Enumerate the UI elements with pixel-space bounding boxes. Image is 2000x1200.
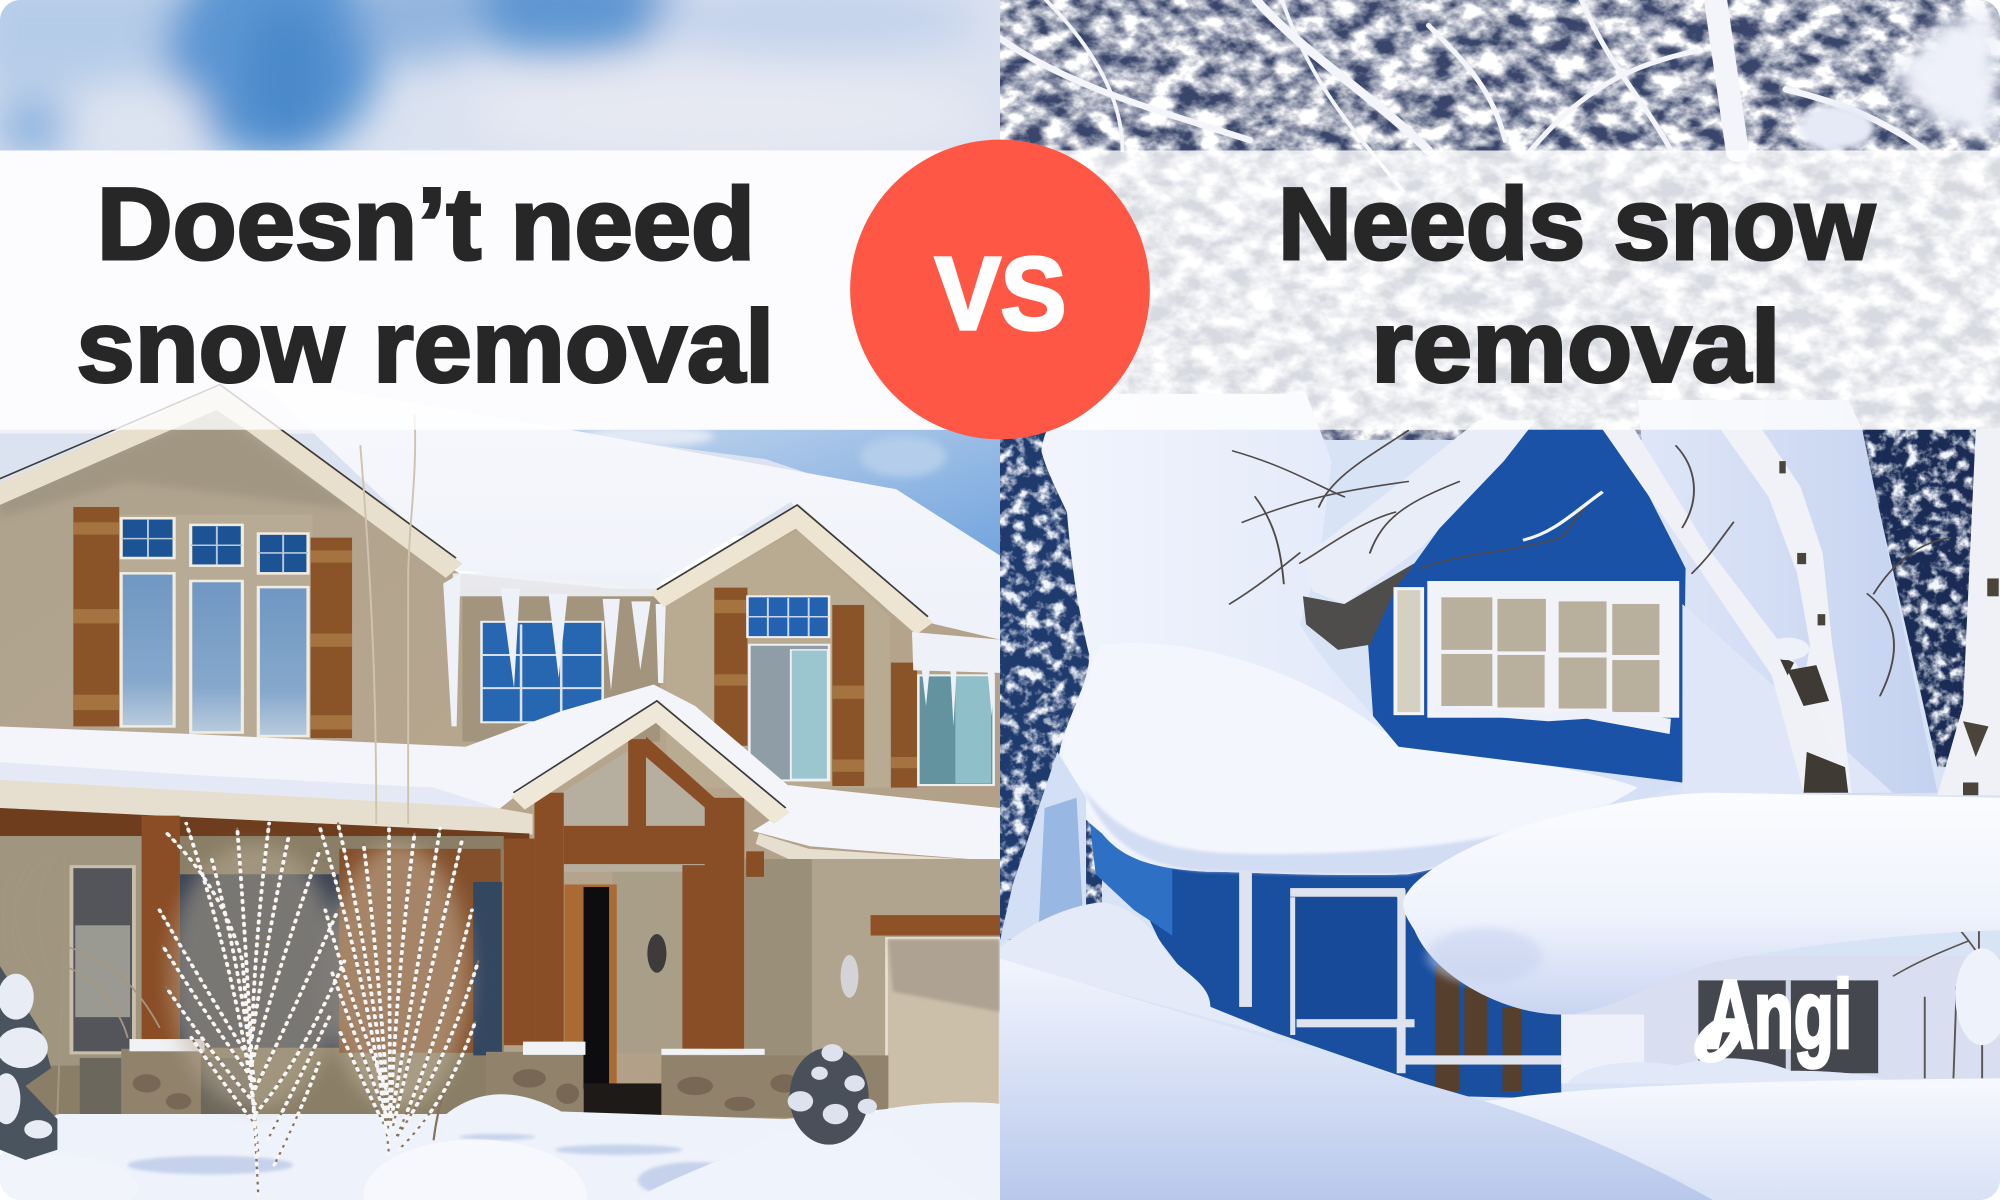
birch trunk second (1721, 430, 1851, 793)
soft twig haze (169, 844, 469, 1109)
center upper wall with window (462, 589, 660, 742)
icicles center (443, 573, 666, 726)
blue dormer (1367, 430, 1686, 782)
panel: house that needs snow removal (1000, 0, 2000, 1200)
lower roof snow (0, 685, 1000, 862)
right bare tree and posts (1893, 849, 1989, 1078)
far right window (918, 675, 994, 785)
right gable shutters (714, 588, 917, 788)
lower blue cabin wall (1086, 788, 1574, 1099)
dark forest left (1000, 430, 1102, 940)
right snow mound (631, 1127, 982, 1200)
small snowy conifer bush (788, 1044, 877, 1145)
snow column at left corner (1000, 752, 1086, 941)
blue door (1295, 897, 1397, 1019)
garage door (886, 938, 1000, 1109)
entry gable interior (562, 752, 705, 872)
dark entry base (584, 1083, 662, 1115)
porch rail (1405, 1055, 1561, 1065)
shutters left (73, 507, 352, 738)
right roof fascia (756, 834, 962, 859)
light sconce (647, 934, 666, 973)
small snowball right (1955, 948, 2000, 1045)
title left: snow removal (77, 289, 774, 403)
big snow overhang (1403, 793, 2000, 1015)
upper transom windows (121, 518, 308, 573)
title left: Doesn’t need (97, 167, 755, 281)
right gable fascia (657, 516, 925, 628)
vs badge: VS (935, 235, 1066, 351)
sheltered snow wall (1638, 400, 1938, 798)
shaded snow under overhang (1427, 928, 1542, 984)
snow mound (364, 1140, 587, 1200)
upper snow mass (1041, 394, 1686, 875)
snow on window sill (1434, 706, 1671, 734)
stone pillars (121, 1049, 888, 1119)
ground shadows (128, 1134, 753, 1199)
foreground snow drift (1000, 958, 1714, 1200)
snowy tree canopy (1000, 0, 2000, 440)
Angi logo: Angi (1707, 961, 1852, 1069)
birch trunk main (1603, 430, 1851, 793)
porch beams (0, 808, 529, 849)
snow mound small left (1000, 902, 1281, 1038)
porch lower wall (0, 836, 504, 1117)
tall thin branches (360, 415, 415, 823)
right wall (812, 859, 1000, 1055)
snow on the dormer side (1682, 604, 1893, 795)
translucent title band (0, 150, 2000, 430)
bare branches (1230, 431, 1950, 696)
right snow field (1485, 1078, 2000, 1200)
large curtain windows (121, 573, 308, 736)
house scene (0, 369, 1000, 1200)
snow on twigs (159, 823, 478, 1196)
fine branch fans (159, 823, 478, 1196)
title right (1278, 167, 1876, 403)
shaded gable peak (1, 430, 346, 514)
panel: house that does not need snow removal (0, 0, 1000, 1200)
title right: Needs snow (1278, 167, 1876, 281)
winter backdrop (1000, 0, 2000, 1200)
right house window (1698, 980, 1878, 1073)
dark eave (1303, 563, 1415, 650)
far right icicles (912, 632, 1000, 726)
dormer side window (1395, 589, 1422, 714)
dormer snow roof (1303, 420, 1536, 604)
dormer main window (1427, 581, 1679, 718)
vs badge (850, 140, 1150, 439)
porch fascia (0, 780, 533, 835)
white snowy branch on dormer (1523, 492, 1603, 540)
upper stucco wall (0, 410, 1000, 1140)
snowy ground (0, 1094, 1000, 1200)
left gable fascia (0, 397, 454, 571)
garage header (871, 915, 1000, 936)
porch post left (142, 816, 180, 1045)
right gable wall (822, 737, 890, 788)
wall lamp (841, 955, 858, 998)
left snow mound (0, 1155, 137, 1200)
title left (77, 167, 774, 403)
title right: removal (1371, 289, 1781, 403)
left porch window (71, 867, 134, 1053)
entry interior wall (612, 872, 689, 1053)
right white house wall (1561, 956, 2000, 1083)
wooden posts (1435, 966, 1522, 1091)
weeping shrub (3, 854, 159, 1114)
lighter cabin corner (1089, 818, 1172, 936)
snowy conifer left (0, 966, 57, 1160)
cabin trim (1239, 872, 1415, 1073)
right gable windows (747, 596, 829, 637)
snow cornice highlight (1064, 643, 1638, 875)
entry gable fascia (518, 711, 782, 818)
center dark porch window (180, 874, 339, 1048)
main snowy roof (314, 430, 1000, 640)
bare trees (3, 415, 478, 1196)
upper wall windows frame (120, 515, 152, 516)
snow drift by window (1568, 1058, 1893, 1083)
sky with clouds (0, 0, 1000, 574)
door opening (564, 885, 617, 1089)
entry timber posts (504, 737, 744, 1050)
cabin scene (1000, 394, 2000, 1200)
Angi logo (1700, 961, 1852, 1069)
birch trunk right (1938, 430, 2000, 795)
dark forest right (1855, 430, 2000, 771)
